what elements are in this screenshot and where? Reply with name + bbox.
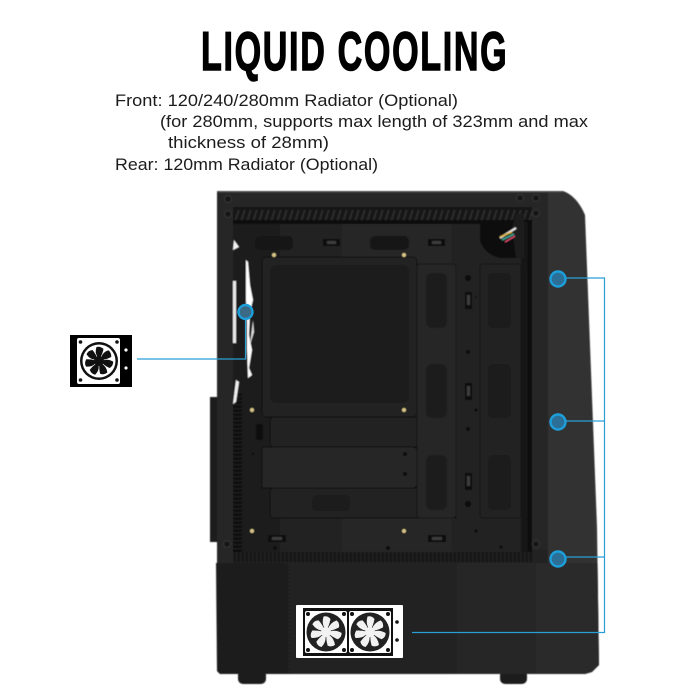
description text: Rear: 120mm Radiator (Optional): [115, 155, 378, 174]
case feet: [238, 670, 527, 684]
gold standoffs: [250, 252, 406, 534]
description text: Front: 120/240/280mm Radiator (Optional): [115, 91, 458, 110]
top frame: [217, 191, 548, 208]
rear side mesh: [233, 385, 242, 552]
front inner frame: [532, 191, 548, 563]
right tray column one: [417, 264, 456, 518]
cable bundle: [480, 214, 524, 258]
callout lines: [137, 278, 604, 632]
description text: thickness of 28mm): [168, 133, 329, 152]
computer case: [210, 191, 599, 684]
CPU cutout: [262, 257, 417, 417]
bottom mesh: [233, 552, 532, 562]
description text: [115, 91, 589, 174]
case base shroud: [216, 563, 560, 674]
side accessory panel: [210, 397, 220, 542]
case front panel: [217, 191, 599, 674]
top mesh: [233, 207, 532, 222]
left fan: [306, 612, 346, 652]
rear fan: [233, 240, 254, 404]
description text: (for 280mm, supports max length of 323mm and max: [160, 112, 589, 131]
title: LIQUID COOLING: [201, 21, 507, 82]
side slot: [256, 424, 263, 440]
interior motherboard tray: [233, 207, 532, 552]
cable channel: [521, 222, 532, 552]
single fan radiator icon: [70, 335, 132, 387]
tray top cutouts: [255, 236, 409, 250]
case screws: [224, 194, 540, 548]
right tray column two: [480, 264, 521, 518]
rear frame: [217, 191, 233, 563]
expansion cutouts: [270, 417, 417, 447]
right fan: [350, 612, 390, 652]
callout markers: [238, 272, 566, 566]
centre strip holes and slots: [273, 275, 502, 550]
dual fan radiator icon: [296, 605, 403, 658]
